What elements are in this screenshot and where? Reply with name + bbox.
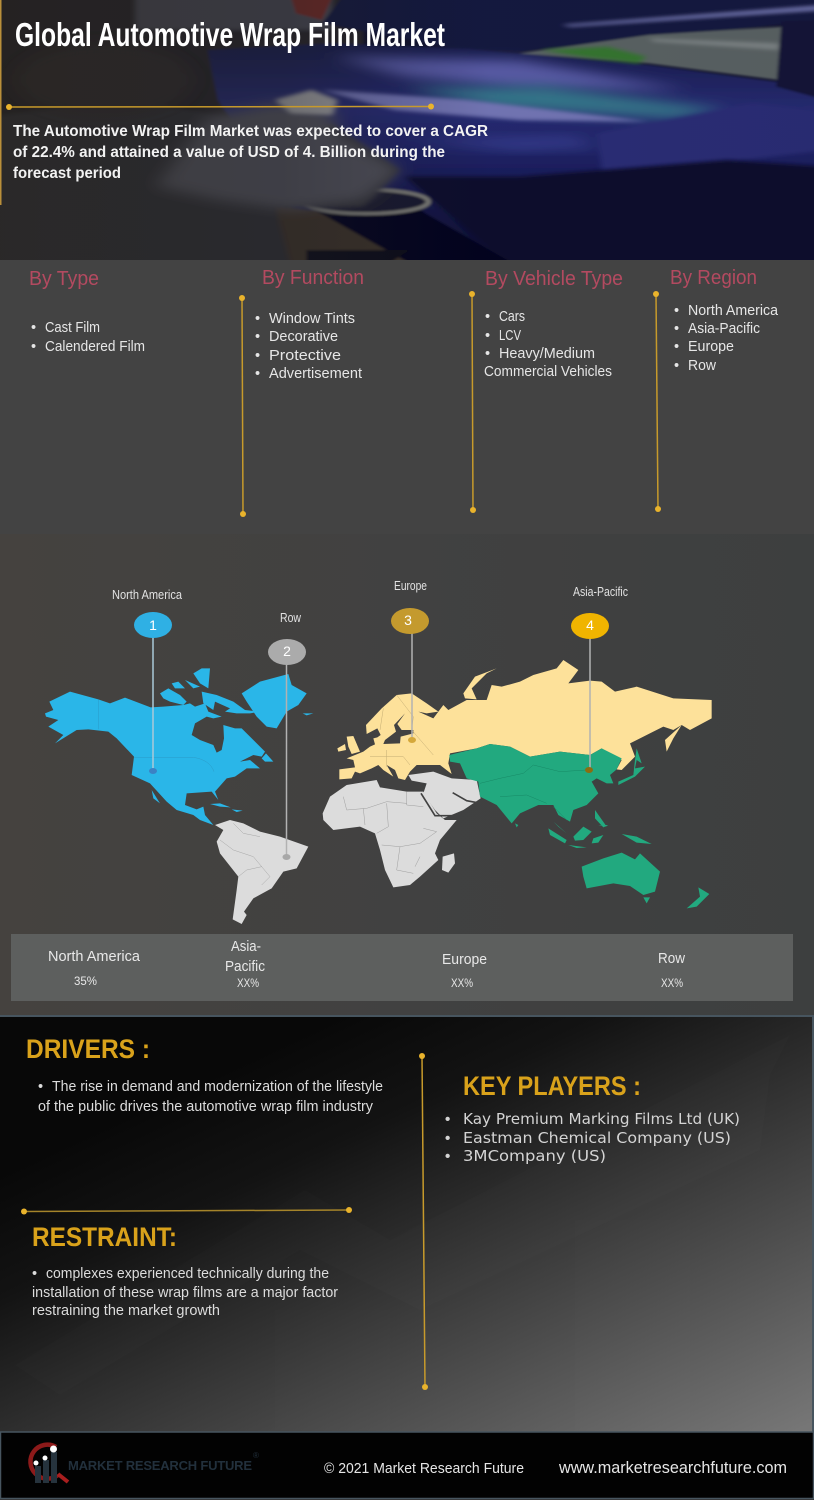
hero divider with endpoints bbox=[6, 104, 434, 110]
drivers heading: DRIVERS : bbox=[26, 1034, 150, 1064]
restraint divider bbox=[21, 1207, 352, 1214]
column: by vehicle type: • bbox=[485, 328, 490, 344]
key players list: Kay Premium Marking Films Ltd (UK) bbox=[463, 1110, 740, 1128]
logo: market research future: ® bbox=[253, 1451, 259, 1460]
logo: market research future: MARKET RESEARCH FUTURE bbox=[68, 1458, 252, 1473]
column: by function: Advertisement bbox=[269, 366, 362, 382]
table column: asia-pacific: XX% bbox=[237, 978, 259, 990]
column: by function: Window Tints bbox=[269, 311, 355, 327]
footer website: www.marketresearchfuture.com bbox=[558, 1459, 787, 1477]
title: Global Automotive Wrap Film Market bbox=[15, 16, 445, 53]
drivers text: • bbox=[38, 1079, 43, 1095]
column: by function: By Function bbox=[262, 267, 364, 289]
column: by function: Protective bbox=[269, 348, 341, 364]
column: by region: Row bbox=[688, 358, 717, 374]
footer copyright: © 2021 Market Research Future bbox=[324, 1460, 524, 1477]
hero summary text bbox=[13, 123, 488, 182]
table column: row: XX% bbox=[661, 978, 683, 990]
hero photo: car being wrapped bbox=[0, 0, 814, 267]
vertical divider bbox=[419, 1053, 428, 1390]
map marker 1: north america bbox=[112, 587, 183, 774]
key players list: • bbox=[445, 1130, 450, 1147]
hero summary text: The Automotive Wrap Film Market was expected to cover a CAGR bbox=[13, 123, 488, 140]
key players list: • bbox=[445, 1111, 450, 1128]
hero summary text: forecast period bbox=[13, 165, 121, 182]
column: by vehicle type: Cars bbox=[499, 309, 525, 325]
table column: north america bbox=[48, 949, 141, 988]
map marker 4: asia-pacific bbox=[571, 584, 628, 773]
map marker 4: asia-pacific: 4 bbox=[586, 617, 594, 633]
column: by region: Europe bbox=[688, 339, 734, 355]
table column: north america: North America bbox=[48, 949, 141, 965]
table column: europe bbox=[442, 952, 487, 990]
map marker 1: north america: 1 bbox=[149, 617, 157, 633]
column: by vehicle type: Commercial Vehicles bbox=[484, 364, 612, 380]
key players list: Eastman Chemical Company (US) bbox=[463, 1129, 731, 1147]
column: by vehicle type bbox=[469, 268, 623, 513]
restraint heading: RESTRAINT: bbox=[32, 1222, 177, 1252]
column: by function: Decorative bbox=[269, 329, 338, 345]
world map: north america bbox=[45, 668, 313, 825]
map marker 3: europe bbox=[391, 578, 429, 743]
map marker 4: asia-pacific: Asia-Pacific bbox=[573, 584, 628, 599]
column: by type: • bbox=[31, 339, 36, 355]
column: by type bbox=[29, 268, 145, 355]
column: by vehicle type: • bbox=[485, 346, 490, 362]
map marker 3: europe: 3 bbox=[404, 612, 412, 628]
table column: row: Row bbox=[658, 951, 685, 967]
restraint text: restraining the market growth bbox=[32, 1303, 220, 1319]
drivers text: The rise in demand and modernization of the lifestyle bbox=[52, 1079, 383, 1095]
map marker 2: row bbox=[268, 610, 306, 860]
column: by type: Cast Film bbox=[45, 320, 100, 336]
column: by vehicle type: • bbox=[485, 309, 490, 325]
map marker 3: europe: Europe bbox=[394, 578, 427, 593]
world map: africa and middle east bbox=[323, 772, 481, 887]
map marker 2: row: Row bbox=[280, 610, 301, 625]
column: by type: By Type bbox=[29, 268, 99, 290]
restraint text bbox=[32, 1266, 338, 1319]
world map: asia-pacific bbox=[449, 744, 709, 908]
panel: drivers, restraint and key players background bbox=[0, 1015, 814, 1432]
restraint text: complexes experienced technically during the bbox=[46, 1266, 329, 1282]
table column: europe: Europe bbox=[442, 952, 487, 968]
column: by region bbox=[653, 267, 779, 512]
drivers text bbox=[38, 1079, 383, 1115]
table column: north america: 35% bbox=[74, 976, 97, 988]
column: by function: • bbox=[255, 311, 260, 327]
column: by type: • bbox=[31, 320, 36, 336]
restraint text: • bbox=[32, 1266, 37, 1282]
restraint text: installation of these wrap films are a major factor bbox=[32, 1285, 338, 1301]
column: by function bbox=[239, 267, 364, 517]
panel: segmentation bbox=[0, 260, 814, 534]
table: regional shares bbox=[11, 934, 793, 1001]
column: by region: North America bbox=[688, 303, 779, 319]
drivers text: of the public drives the automotive wrap film industry bbox=[38, 1099, 374, 1115]
column: by function: • bbox=[255, 348, 260, 364]
column: by type: Calendered Film bbox=[45, 339, 145, 355]
world map: south america bbox=[215, 820, 308, 924]
map marker 1: north america: North America bbox=[112, 587, 183, 602]
table column: asia-pacific: Asia- bbox=[231, 939, 261, 955]
map marker 2: row: 2 bbox=[283, 643, 291, 659]
column: by region: • bbox=[674, 358, 679, 374]
key players heading: KEY PLAYERS : bbox=[463, 1071, 641, 1101]
table column: asia-pacific bbox=[225, 939, 265, 990]
column: by region: • bbox=[674, 321, 679, 337]
column: by function: • bbox=[255, 366, 260, 382]
column: by region: • bbox=[674, 303, 679, 319]
world map: europe and russia bbox=[337, 660, 712, 780]
panel: regional map background bbox=[0, 534, 814, 1016]
column: by vehicle type: Heavy/Medium bbox=[499, 346, 595, 362]
table column: asia-pacific: Pacific bbox=[225, 959, 265, 975]
logo: market research future bbox=[30, 1445, 259, 1483]
column: by region: By Region bbox=[670, 267, 757, 289]
column: by region: Asia-Pacific bbox=[688, 321, 760, 337]
column: by function: • bbox=[255, 329, 260, 345]
column: by vehicle type: By Vehicle Type bbox=[485, 268, 623, 290]
column: by vehicle type: LCV bbox=[499, 328, 521, 344]
key players list: • bbox=[445, 1148, 450, 1165]
hero summary text: of 22.4% and attained a value of USD of 4. Billion during the bbox=[13, 144, 445, 161]
key players list: 3MCompany (US) bbox=[463, 1147, 606, 1165]
table column: europe: XX% bbox=[451, 978, 473, 990]
footer bar bbox=[0, 1432, 814, 1498]
key players list bbox=[445, 1110, 740, 1165]
table column: row bbox=[658, 951, 685, 990]
column: by region: • bbox=[674, 339, 679, 355]
